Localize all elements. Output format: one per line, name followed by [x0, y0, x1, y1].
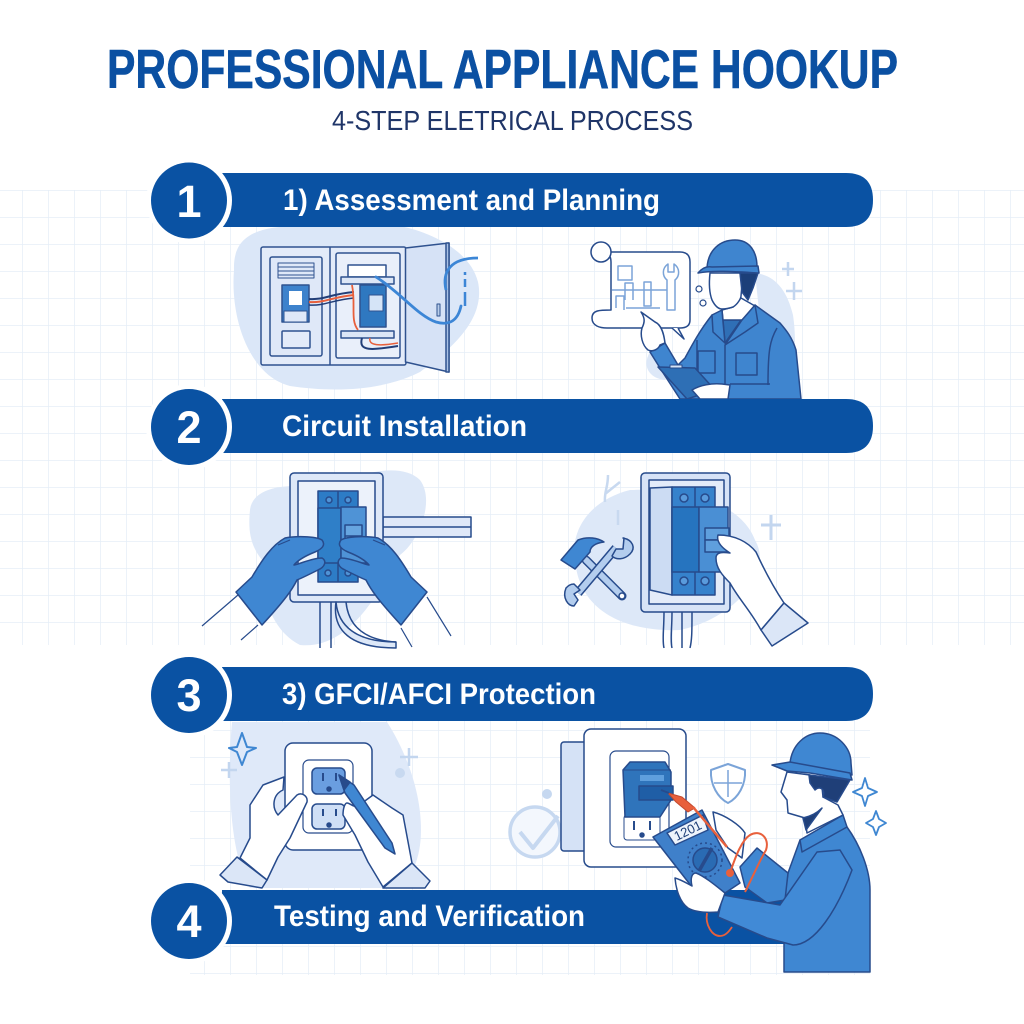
banner 4: 4 [176, 896, 202, 947]
banner 3: 3 [176, 670, 202, 721]
illustration: technician testing GFCI with multimeter [510, 729, 886, 972]
banner 1: 1 [176, 176, 202, 227]
banner 4 [146, 878, 790, 964]
banner 1 [146, 158, 873, 244]
banner 2 [146, 384, 873, 470]
banner 4: Testing and Verification [274, 900, 585, 933]
illustration: gloved hands seating a breaker [202, 470, 471, 648]
illustration: technician testing GFCI with multimeter: 1201 [671, 817, 704, 844]
subtitle: 4-STEP ELETRICAL PROCESS [332, 105, 693, 136]
banner 2: 2 [176, 402, 202, 453]
illustration: worker reviewing blueprint [591, 240, 802, 399]
illustration: open electrical panel [233, 226, 479, 389]
illustration: breaker with tools and hand [561, 473, 808, 648]
banner 3 [146, 652, 873, 738]
banner 1: 1) Assessment and Planning [283, 184, 660, 217]
banner 3: 3) GFCI/AFCI Protection [282, 678, 596, 711]
illustration: hands testing outlet [220, 722, 430, 888]
banner 2: Circuit Installation [282, 410, 527, 443]
